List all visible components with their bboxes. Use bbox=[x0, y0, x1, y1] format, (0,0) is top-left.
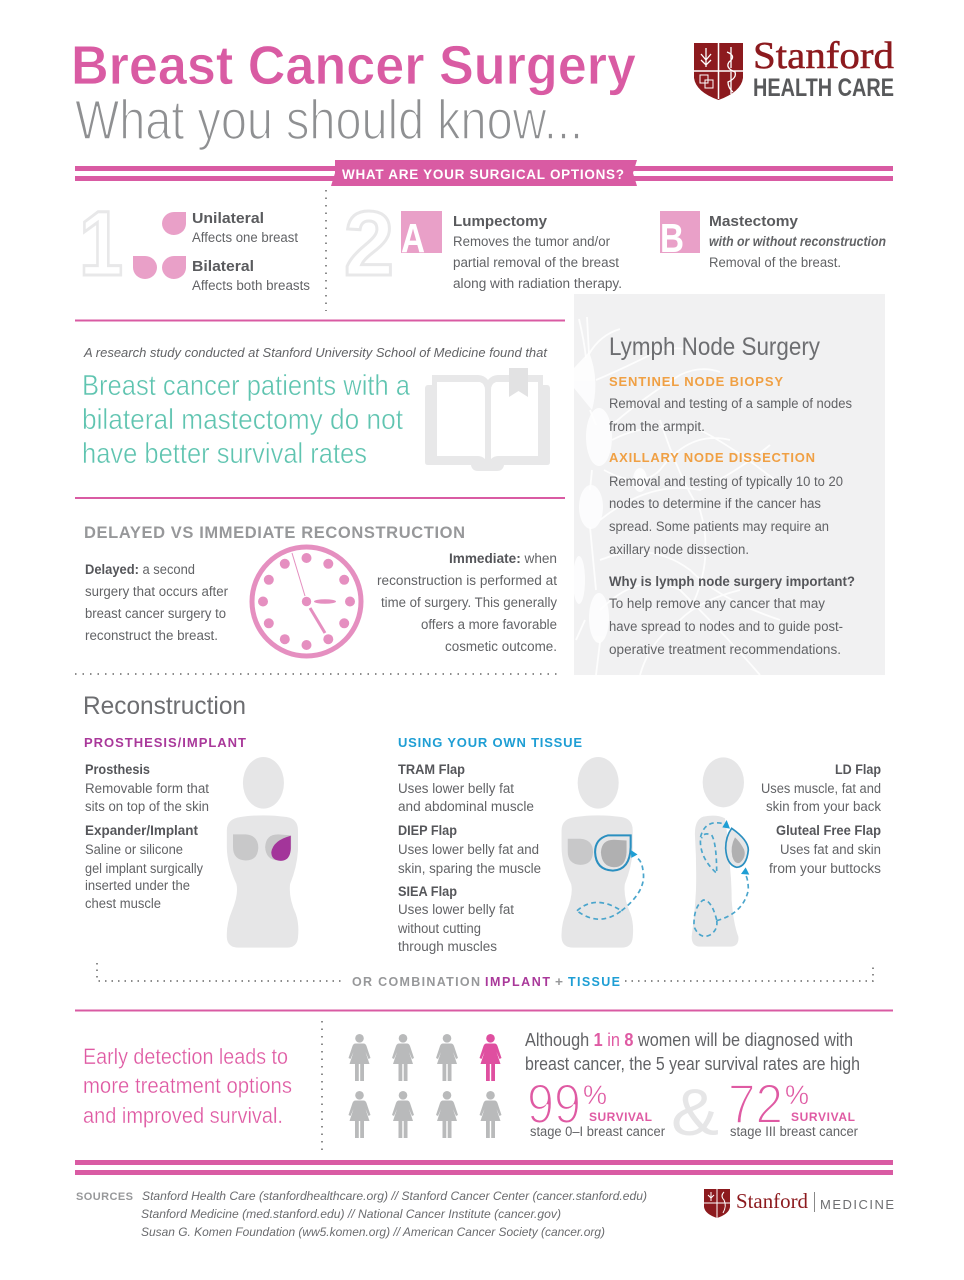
logo: Stanford Medicine bbox=[704, 1189, 894, 1218]
survival statistic text bbox=[525, 1030, 860, 1074]
option 2: lumpectomy or mastectomy: A bbox=[401, 215, 425, 261]
title bbox=[71, 34, 636, 151]
prosthesis and implant text: Prosthesis bbox=[85, 762, 150, 777]
option 2: lumpectomy or mastectomy: Mastectomy bbox=[709, 213, 799, 230]
icon: open book bbox=[425, 368, 550, 471]
panel: lymph node surgery: Removal and testing of a sample of nodes bbox=[609, 396, 852, 411]
panel: lymph node surgery bbox=[573, 294, 885, 675]
prosthesis and implant text: PROSTHESIS/IMPLANT bbox=[84, 735, 246, 750]
statistic: 72 percent survival: 72 bbox=[728, 1072, 783, 1135]
panel: lymph node surgery: Lymph Node Surgery bbox=[609, 333, 820, 361]
flap text: LD and gluteal bbox=[761, 762, 881, 876]
statistic: 72 percent survival bbox=[728, 1072, 858, 1139]
panel: lymph node surgery: nodes to determine if the cancer has bbox=[609, 496, 821, 511]
pictogram: 1 in 8 women bbox=[348, 1034, 502, 1138]
combination implant plus tissue: IMPLANT bbox=[485, 975, 550, 989]
own tissue text: TRAM, DIEP, SIEA bbox=[397, 735, 582, 954]
own tissue text: TRAM, DIEP, SIEA: SIEA Flap bbox=[398, 884, 457, 899]
option 2: lumpectomy or mastectomy: along with radiation therapy. bbox=[453, 276, 622, 291]
combination implant plus tissue bbox=[97, 963, 873, 989]
flap text: LD and gluteal: skin from your back bbox=[766, 799, 881, 814]
statistic: 99 percent survival bbox=[527, 1072, 665, 1139]
prosthesis and implant text: chest muscle bbox=[85, 896, 161, 911]
delayed vs immediate reconstruction: cosmetic outcome. bbox=[445, 639, 557, 654]
prosthesis and implant text: Saline or silicone bbox=[85, 842, 183, 857]
panel: lymph node surgery: operative treatment recommendations. bbox=[609, 642, 841, 657]
panel: lymph node surgery: SENTINEL NODE BIOPSY bbox=[609, 374, 783, 389]
option 1: unilateral or bilateral: 1 bbox=[79, 193, 123, 295]
prosthesis and implant text: Expander/Implant bbox=[85, 823, 198, 838]
delayed vs immediate reconstruction: offers a more favorable bbox=[421, 617, 557, 632]
panel: lymph node surgery: Why is lymph node surgery important? bbox=[609, 574, 855, 589]
delayed vs immediate reconstruction: DELAYED VS IMMEDIATE RECONSTRUCTION bbox=[84, 524, 465, 542]
panel: lymph node surgery: from the armpit. bbox=[609, 419, 705, 434]
panel: lymph node surgery: spread. Some patients may require an bbox=[609, 519, 829, 534]
option 2: lumpectomy or mastectomy: Removal of the breast. bbox=[709, 255, 841, 270]
delayed vs immediate reconstruction: reconstruction is performed at bbox=[377, 573, 557, 588]
option 2: lumpectomy or mastectomy: B bbox=[660, 215, 684, 261]
delayed vs immediate reconstruction: Delayed: a second bbox=[85, 562, 195, 577]
panel: lymph node surgery: AXILLARY NODE DISSECTION bbox=[609, 450, 815, 465]
prosthesis and implant text: sits on top of the skin bbox=[85, 799, 209, 814]
own tissue text: TRAM, DIEP, SIEA: USING YOUR OWN TISSUE bbox=[398, 735, 582, 750]
combination implant plus tissue: OR COMBINATION bbox=[352, 975, 480, 989]
own tissue text: TRAM, DIEP, SIEA: Uses lower belly fat and bbox=[398, 842, 539, 857]
section banner: surgical options bbox=[75, 160, 893, 186]
delayed vs immediate reconstruction bbox=[84, 524, 557, 654]
delayed vs immediate reconstruction: reconstruct the breast. bbox=[85, 628, 218, 643]
delayed vs immediate reconstruction: surgery that occurs after bbox=[85, 584, 228, 599]
early detection statement bbox=[83, 1044, 292, 1128]
statistic: 99 percent survival: stage 0–I breast cancer bbox=[530, 1124, 665, 1139]
early detection statement: and improved survival. bbox=[83, 1103, 283, 1128]
delayed vs immediate reconstruction: time of surgery. This generally bbox=[381, 595, 557, 610]
logo: Stanford Medicine: Stanford bbox=[736, 1189, 808, 1213]
option 1: unilateral or bilateral bbox=[79, 193, 310, 295]
flap text: LD and gluteal: LD Flap bbox=[835, 762, 881, 777]
own tissue text: TRAM, DIEP, SIEA: skin, sparing the muscle bbox=[398, 861, 541, 876]
early detection statement: more treatment options bbox=[83, 1073, 292, 1098]
statistic: 72 percent survival: stage III breast cancer bbox=[730, 1124, 858, 1139]
flap text: LD and gluteal: Gluteal Free Flap bbox=[776, 823, 881, 838]
title: What you should know... bbox=[75, 88, 583, 151]
sources: Susan G. Komen Foundation (ww5.komen.org) // American Cancer Society (cancer.org) bbox=[141, 1225, 605, 1239]
panel: lymph node surgery: have spread to nodes and to guide post- bbox=[609, 619, 843, 634]
panel: lymph node surgery: Removal and testing of typically 10 to 20 bbox=[609, 474, 843, 489]
own tissue text: TRAM, DIEP, SIEA: DIEP Flap bbox=[398, 823, 457, 838]
option 2: lumpectomy or mastectomy: Lumpectomy bbox=[453, 213, 548, 230]
own tissue text: TRAM, DIEP, SIEA: Uses lower belly fat bbox=[398, 781, 514, 796]
logo: Stanford Medicine: MEDICINE bbox=[820, 1197, 894, 1212]
survival statistic text: breast cancer, the 5 year survival rates are high bbox=[525, 1054, 860, 1074]
icon: clock bbox=[252, 547, 361, 656]
logo: Stanford Health Care: HEALTH CARE bbox=[753, 74, 894, 102]
illustration: side body with back and gluteal flap bbox=[692, 757, 749, 947]
section banner: surgical options: WHAT ARE YOUR SURGICAL OPTIONS? bbox=[342, 167, 624, 182]
own tissue text: TRAM, DIEP, SIEA: without cutting bbox=[397, 921, 481, 936]
early detection statement: Early detection leads to bbox=[83, 1044, 288, 1069]
prosthesis and implant text: Removable form that bbox=[85, 781, 209, 796]
research study callout: bilateral mastectomy do not bbox=[82, 404, 403, 436]
title: Breast Cancer Surgery bbox=[71, 34, 636, 96]
sources: Stanford Medicine (med.stanford.edu) // National Cancer Institute (cancer.gov) bbox=[141, 1207, 561, 1221]
combination implant plus tissue: TISSUE bbox=[568, 975, 620, 989]
combination implant plus tissue: + bbox=[555, 975, 563, 989]
prosthesis and implant text bbox=[84, 735, 246, 911]
option 1: unilateral or bilateral: Bilateral bbox=[192, 258, 254, 275]
option 1: unilateral or bilateral: Affects one breast bbox=[192, 230, 298, 245]
sources: SOURCES bbox=[76, 1191, 133, 1203]
illustration: body with implant bbox=[227, 757, 298, 948]
sources: Stanford Health Care (stanfordhealthcare.org) // Stanford Cancer Center (cancer.stanford.edu) bbox=[142, 1189, 647, 1203]
flap text: LD and gluteal: Uses muscle, fat and bbox=[761, 781, 881, 796]
logo: Stanford Health Care: Stanford bbox=[753, 35, 894, 77]
prosthesis and implant text: gel implant surgically bbox=[85, 861, 203, 876]
research study callout bbox=[82, 345, 548, 470]
research study callout: have better survival rates bbox=[82, 438, 367, 470]
statistic: 72 percent survival: % bbox=[785, 1080, 809, 1110]
flap text: LD and gluteal: from your buttocks bbox=[769, 861, 881, 876]
statistic: 72 percent survival: SURVIVAL bbox=[791, 1110, 855, 1124]
statistic: 99 percent survival: SURVIVAL bbox=[589, 1110, 652, 1124]
option 1: unilateral or bilateral: Affects both breasts bbox=[192, 278, 310, 293]
ampersand: & bbox=[671, 1075, 719, 1149]
illustration: front body with abdominal flap bbox=[562, 757, 644, 948]
research study callout: A research study conducted at Stanford University School of Medicine found that bbox=[83, 345, 548, 360]
survival statistic text: Although 1 in 8 women will be diagnosed with bbox=[525, 1030, 853, 1050]
delayed vs immediate reconstruction: Immediate: when bbox=[449, 551, 557, 566]
prosthesis and implant text: inserted under the bbox=[85, 878, 190, 893]
delayed vs immediate reconstruction: breast cancer surgery to bbox=[85, 606, 226, 621]
option 2: lumpectomy or mastectomy: partial removal of the breast bbox=[453, 255, 619, 270]
option 2: lumpectomy or mastectomy: with or without reconstruction bbox=[709, 234, 886, 249]
option 2: lumpectomy or mastectomy bbox=[344, 193, 886, 295]
option 2: lumpectomy or mastectomy: 2 bbox=[344, 193, 394, 295]
panel: lymph node surgery: To help remove any cancer that may bbox=[609, 596, 825, 611]
statistic: 99 percent survival: 99 bbox=[527, 1072, 581, 1135]
research study callout: Breast cancer patients with a bbox=[82, 370, 411, 402]
option 1: unilateral or bilateral: Unilateral bbox=[192, 210, 264, 227]
sources bbox=[76, 1189, 647, 1239]
own tissue text: TRAM, DIEP, SIEA: through muscles bbox=[398, 939, 497, 954]
own tissue text: TRAM, DIEP, SIEA: TRAM Flap bbox=[398, 762, 465, 777]
logo: Stanford Health Care bbox=[694, 35, 894, 102]
heading: reconstruction: Reconstruction bbox=[83, 692, 246, 720]
panel: lymph node surgery: axillary node dissection. bbox=[609, 542, 749, 557]
own tissue text: TRAM, DIEP, SIEA: and abdominal muscle bbox=[398, 799, 534, 814]
own tissue text: TRAM, DIEP, SIEA: Uses lower belly fat bbox=[398, 902, 514, 917]
statistic: 99 percent survival: % bbox=[583, 1080, 607, 1110]
option 2: lumpectomy or mastectomy: Removes the tumor and/or bbox=[453, 234, 610, 249]
flap text: LD and gluteal: Uses fat and skin bbox=[780, 842, 881, 857]
